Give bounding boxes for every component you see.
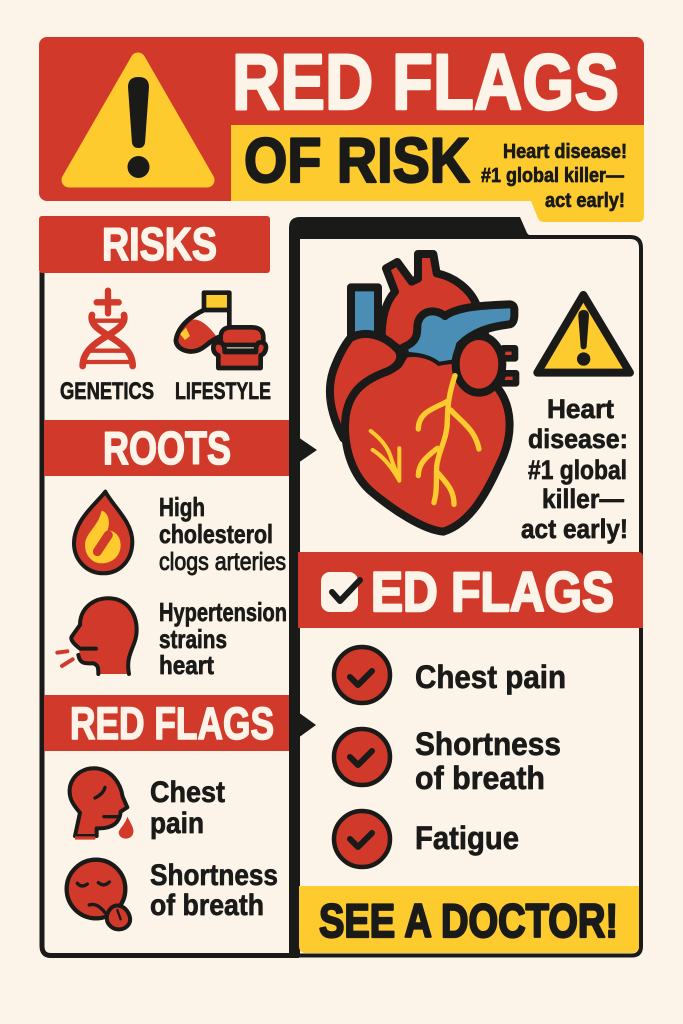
text: shortness of breath: of breath [415,760,545,796]
arrow: red flags to list [298,712,316,738]
text: shortness of breath [415,726,561,796]
icon: warning triangle [69,60,207,180]
icon: checkbox [321,572,360,612]
text: shortness of breath left: of breath [150,889,264,922]
icon: check 2 [334,729,390,785]
header note: Heart disease! [503,141,627,163]
text: chest pain: Chest pain [415,659,566,695]
text: chest pain left: Chest [150,776,225,809]
text: hypertension: heart [159,650,214,680]
heading: red flags right [298,552,643,628]
coronary vessels [418,376,479,504]
header note [481,141,627,212]
text: shortness of breath left [150,859,278,922]
yellow subtitle band [231,125,644,222]
icon: check 1 [334,647,390,703]
icon: face shortness of breath [67,860,130,929]
text: high cholesterol: cholesterol [159,519,273,549]
icon: head with hypertension [57,598,137,674]
heading: risks: RISKS [102,218,217,270]
text: heart disease callout: #1 global [528,455,627,485]
text: heart disease callout: act early! [521,514,628,544]
folder tab [289,217,534,958]
heading: red flags right: ED FLAGS [371,560,614,623]
text: hypertension: strains [159,624,227,654]
arrow: roots to heart [298,437,317,463]
text: high cholesterol: High [159,492,205,522]
text: heart disease callout: Heart [547,394,614,424]
text: chest pain left: pain [150,807,204,840]
icon: check 3 [334,811,390,867]
icon: anatomical heart [330,254,516,532]
icon: blood drop with cholesterol [74,492,132,573]
icon: dna genetics [83,291,133,366]
title: RED FLAGS [232,37,619,126]
heading: roots: ROOTS [103,422,231,474]
text: fatigue: Fatigue [415,820,519,856]
text: heart disease callout: disease: [528,424,628,454]
icon: head with chest pain [70,768,133,839]
text: shortness of breath left: Shortness [150,859,278,892]
heading: red flags left: RED FLAGS [70,698,274,749]
heading: risks [39,216,270,273]
text: hypertension: Hypertension [159,597,287,627]
heading: roots [44,420,289,476]
panel: header banner [39,37,644,222]
panel: left column [39,216,292,956]
call to action [299,886,639,953]
call to action: SEE A DOCTOR! [319,894,618,947]
text: high cholesterol: clogs arteries [159,548,286,576]
panel: right column [289,217,643,958]
icon: lifestyle sock and armchair [176,293,266,368]
text: shortness of breath: Shortness [415,726,561,762]
text: chest pain left [150,776,225,840]
header note: act early! [545,190,625,212]
header note: #1 global killer— [481,165,624,187]
subtitle: OF RISK [244,126,470,196]
text: heart disease callout [521,394,628,544]
text: heart disease callout: killer— [542,484,624,514]
icon: small warning triangle [537,295,630,373]
label: lifestyle: LIFESTYLE [175,378,271,405]
text: high cholesterol [159,492,286,576]
text: hypertension [159,597,287,680]
label: genetics: GENETICS [60,378,154,405]
